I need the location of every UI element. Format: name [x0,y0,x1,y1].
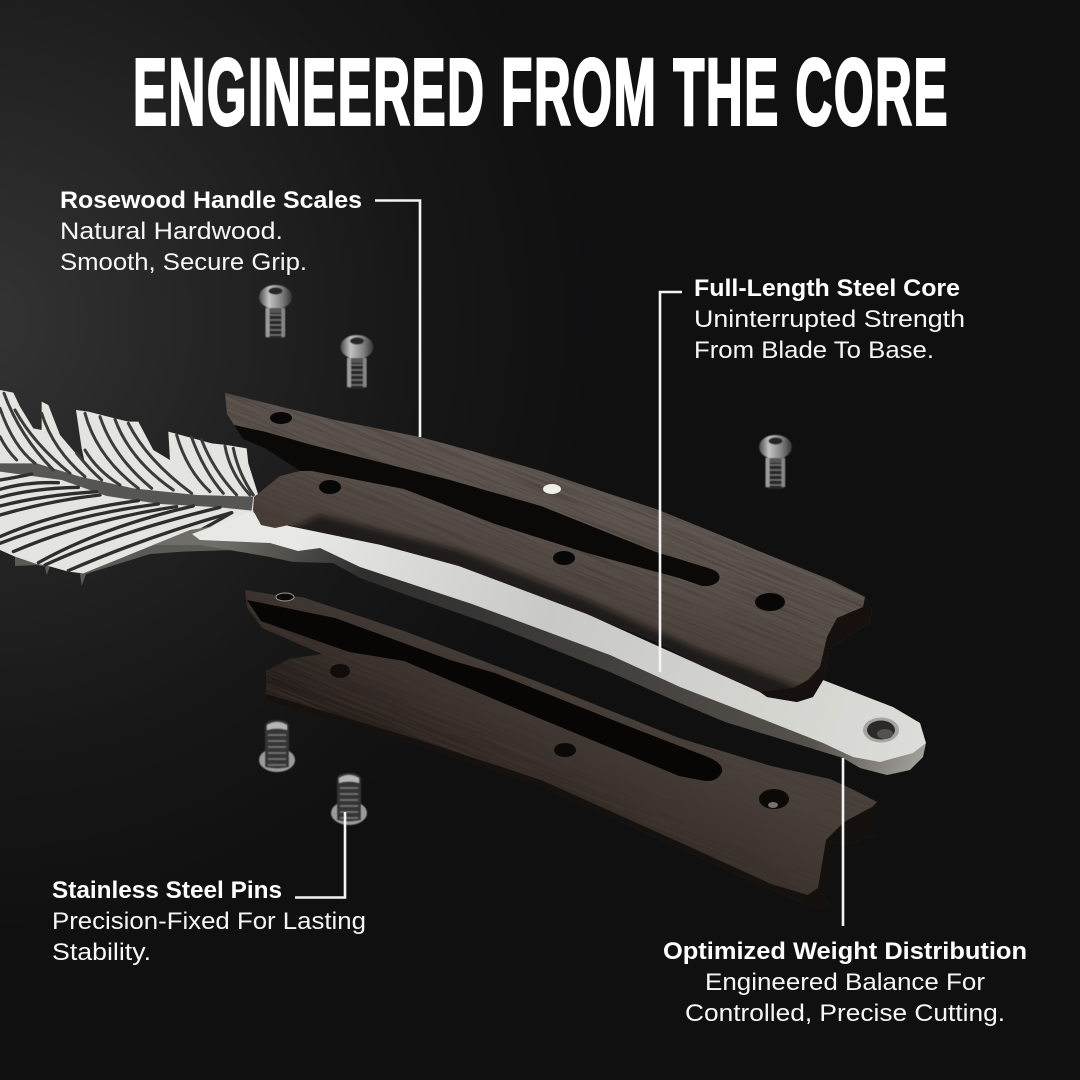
leader line [295,812,345,898]
callout: optimized weight distribution [663,758,1027,1027]
shadow slot [247,600,722,781]
screw 3 [759,435,792,489]
wood shape [245,590,877,910]
wood shape [225,393,872,702]
wood grain [257,621,706,846]
callout: stainless steel pins [52,812,366,966]
spine [0,463,253,511]
leader line [375,200,420,437]
upper barb grooves [0,393,253,495]
lower handle scales [245,590,877,910]
screw 2 [340,335,374,389]
steel core tang [153,512,926,775]
pin holes [276,593,294,601]
tang face [192,512,926,762]
callout: optimized weight distribution: Engineered Balance For [705,969,985,996]
callout: stainless steel pins: Precision-Fixed For Lasting [52,908,366,935]
callout: optimized weight distribution: Optimized Weight Distribution [663,938,1027,965]
callout: rosewood handle scales [60,187,420,437]
end notch shading [800,802,877,910]
screws [259,285,792,825]
feather blade [0,390,270,586]
callout: rosewood handle scales: Natural Hardwood. [60,218,283,245]
lower barb grooves [0,474,232,571]
pin holes [270,412,292,424]
callout: stainless steel pins: Stainless Steel Pins [52,877,282,904]
blade edge wall [0,537,270,586]
tang side wall [153,520,926,775]
upper handle scales [225,393,872,702]
callout: full-length steel core: Full-Length Steel Core [694,275,960,302]
white pin dot [543,484,561,494]
blade face [0,390,270,573]
shadow slot [234,425,720,586]
lower edge shading [289,515,808,706]
callout: rosewood handle scales: Rosewood Handle Scales [60,187,362,214]
end notch shading [760,597,872,702]
callout: rosewood handle scales: Smooth, Secure Grip. [60,249,307,276]
leader line [842,758,844,926]
callout: optimized weight distribution: Controlled, Precise Cutting. [685,1000,1005,1027]
callout: full-length steel core [660,275,965,672]
callout: full-length steel core: From Blade To Base. [694,337,934,364]
screw 4 [259,720,295,772]
wood grain [225,394,864,702]
screw 1 [259,285,292,339]
leader line [660,292,682,672]
callout: stainless steel pins: Stability. [52,939,151,966]
tang hole [863,718,899,742]
bottom edge [266,694,831,910]
screw 5 [331,773,367,825]
callout: full-length steel core: Uninterrupted Strength [694,306,965,333]
